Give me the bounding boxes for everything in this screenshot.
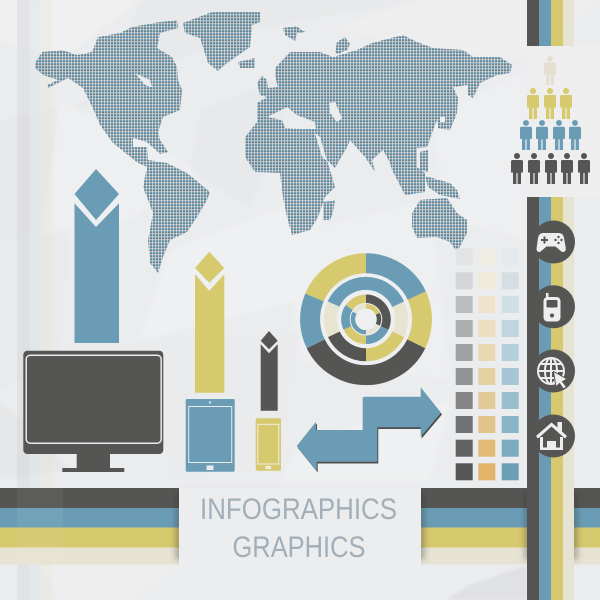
swatch column: blue bbox=[502, 248, 519, 480]
people panel backdrop bbox=[527, 46, 600, 197]
icon: tablet bbox=[186, 399, 235, 472]
double zigzag arrow bbox=[297, 387, 442, 472]
donut chart bbox=[310, 263, 422, 375]
title: INFOGRAPHICS: INFOGRAPHICS bbox=[200, 493, 397, 526]
person row: blue bbox=[520, 120, 581, 150]
top stripe segment bbox=[527, 0, 574, 46]
icon: house bbox=[532, 414, 575, 458]
person row: cream bbox=[544, 56, 556, 85]
people pyramid bbox=[511, 56, 590, 184]
vertical colour stripes bbox=[524, 197, 578, 600]
person row: yellow bbox=[527, 88, 572, 119]
map: North and South America bbox=[35, 20, 210, 273]
icon: game controller bbox=[532, 220, 575, 264]
world map dots bbox=[35, 12, 512, 273]
short dark arrow bbox=[261, 331, 278, 411]
map: Madagascar bbox=[323, 200, 335, 220]
ring 3 bbox=[345, 299, 387, 340]
map: Greenland bbox=[183, 12, 260, 71]
ring 1 bbox=[310, 263, 422, 375]
colour swatch palette bbox=[456, 248, 519, 480]
subtitle: GRAPHICS: GRAPHICS bbox=[232, 531, 366, 564]
tall blue arrow bbox=[74, 169, 119, 343]
ring 4 bbox=[353, 306, 379, 332]
ring 2 bbox=[330, 283, 402, 355]
swatch column: ochre bbox=[478, 248, 495, 480]
swatch column: grey bbox=[456, 248, 473, 480]
medium yellow arrow bbox=[195, 252, 224, 393]
map: Eurasia and Africa bbox=[245, 35, 512, 235]
icon: smartphone bbox=[256, 418, 281, 471]
map: New Guinea bbox=[425, 176, 460, 199]
icon: globe with cursor bbox=[532, 350, 575, 392]
map: Arctic islands bbox=[335, 37, 350, 54]
icon: desktop monitor bbox=[23, 351, 163, 472]
map: Svalbard bbox=[283, 26, 305, 41]
title card bbox=[175, 488, 425, 600]
person row: dark bbox=[511, 153, 590, 184]
map: Australia bbox=[412, 198, 467, 252]
map: Iceland bbox=[238, 58, 255, 68]
horizontal colour bands bbox=[0, 488, 600, 564]
map: Philippines bbox=[420, 150, 428, 172]
icon: mobile phone bbox=[532, 285, 575, 328]
faint vertical stripes at left bbox=[17, 0, 52, 600]
